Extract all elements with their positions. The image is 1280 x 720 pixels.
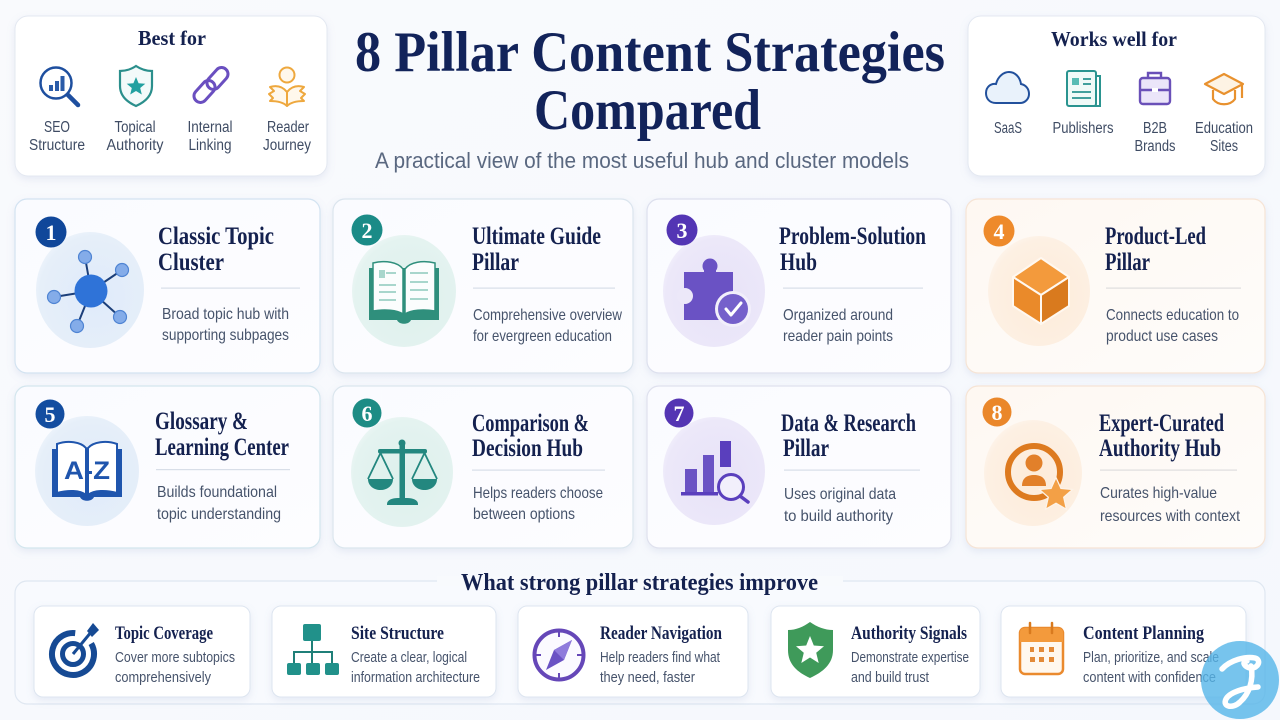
icon: briefcase (1140, 73, 1170, 104)
panel: works well for (968, 16, 1265, 176)
title: 8 Pillar Content Strategies (355, 21, 945, 84)
icon blob (36, 232, 144, 348)
badge 1: 1 (46, 220, 56, 245)
title and text: Reader Navigation (600, 623, 722, 644)
card description: Connects education to (1106, 307, 1239, 324)
panel: strategy 1 (15, 199, 320, 373)
card title: Glossary & (155, 408, 248, 435)
icon: sitemap (287, 624, 339, 675)
card title: Ultimate Guide (472, 223, 601, 250)
panel: strategy 8 (966, 386, 1265, 548)
heading: best for: Best for (138, 26, 206, 50)
icon blob (984, 420, 1082, 526)
card description: Organized around (783, 307, 893, 324)
label: Internal Linking: Linking (188, 137, 232, 154)
card description: supporting subpages (162, 327, 289, 344)
label: B2B Brands: B2B (1143, 120, 1167, 137)
card title: Expert-Curated (1099, 410, 1224, 437)
title and text: Plan, prioritize, and scale (1083, 649, 1219, 666)
badge 7 (664, 398, 694, 428)
label: B2B Brands: Brands (1134, 138, 1176, 155)
title and text: information architecture (351, 669, 480, 686)
icon: calendar (1020, 623, 1063, 674)
card description: for evergreen education (473, 328, 612, 345)
card description: Uses original data (784, 486, 896, 503)
panel: what strong pillar strategies improve (15, 570, 1265, 704)
panel: strategy 6 (333, 386, 633, 548)
card title: Product-Led (1105, 223, 1206, 250)
badge 6: 6 (362, 401, 372, 426)
label: SEO Structure: SEO (44, 119, 70, 136)
section heading: What strong pillar strategies improve (461, 570, 818, 596)
benefit card: reader navigation (518, 606, 748, 697)
label: Internal Linking: Internal (188, 119, 232, 136)
card description: product use cases (1106, 328, 1218, 345)
card title: Problem-Solution (779, 223, 926, 250)
card title: Pillar (472, 249, 519, 276)
icon: target (44, 623, 102, 683)
card title: Authority Hub (1099, 435, 1221, 462)
title and text (1083, 623, 1219, 686)
icon: expert with star (1008, 446, 1071, 508)
panel: best for (15, 16, 327, 176)
title and text: they need, faster (600, 669, 695, 686)
title: Compared (534, 79, 761, 142)
badge 2: 2 (362, 218, 372, 243)
watermark logo (1201, 641, 1279, 719)
title and text (600, 623, 722, 686)
card title: Learning Center (155, 434, 289, 461)
title and text: content with confidence (1083, 669, 1216, 686)
panel: strategy 5 (15, 386, 320, 548)
card description: resources with context (1100, 508, 1240, 525)
benefit card: authority signals (771, 606, 980, 697)
title and text: comprehensively (115, 669, 211, 686)
card title: Hub (780, 249, 817, 276)
icon: cloud (986, 72, 1029, 103)
icon: chain link (191, 65, 231, 105)
card description: Broad topic hub with (162, 306, 289, 323)
icon: shield star (120, 66, 152, 106)
card title: Cluster (158, 249, 224, 276)
title and text (851, 623, 969, 686)
badge 8: 8 (992, 400, 1002, 425)
icon: reader (269, 68, 305, 106)
badge 1 (36, 216, 66, 248)
card description: Helps readers choose (473, 485, 603, 502)
card description: between options (473, 506, 575, 523)
badge 8 (982, 398, 1012, 426)
panel: strategy 2 (333, 199, 633, 373)
title and text: Site Structure (351, 623, 444, 644)
icon blob (352, 235, 456, 347)
title and text: Demonstrate expertise (851, 649, 969, 666)
title and text (351, 623, 480, 686)
badge 3: 3 (676, 218, 688, 243)
badge 5 (36, 400, 64, 428)
badge 5: 5 (44, 402, 56, 427)
panel: strategy 4 (966, 199, 1265, 373)
benefit card: content planning (1001, 606, 1246, 697)
card description: Curates high-value (1100, 485, 1217, 502)
badge 6 (352, 398, 382, 428)
benefit card: site structure (272, 606, 496, 697)
card title: Data & Research (781, 410, 916, 437)
badge 3 (666, 214, 698, 246)
icon: newspaper (1067, 71, 1100, 106)
title and text: Authority Signals (851, 623, 967, 644)
icon: data chart with magnifier (681, 441, 748, 502)
badge 4 (984, 216, 1014, 246)
card title: Classic Topic (158, 223, 274, 250)
icon: open book (369, 262, 439, 324)
panel: strategy 3 (647, 199, 951, 373)
icon blob (351, 417, 453, 527)
title and text: Create a clear, logical (351, 649, 467, 666)
card title: Decision Hub (472, 435, 583, 462)
card title: Comparison & (472, 410, 589, 437)
label: Education Sites: Sites (1210, 138, 1238, 155)
icon: A-Z glossary book (52, 442, 122, 501)
icon: compass (534, 630, 584, 680)
card title: Pillar (1105, 249, 1150, 276)
card description: reader pain points (783, 328, 893, 345)
label: Education Sites: Education (1195, 120, 1253, 137)
icon: puzzle piece with check (677, 258, 751, 327)
icon: SEO magnifier (40, 68, 78, 105)
title and text: Topic Coverage (115, 623, 213, 644)
label: Publishers: Publishers (1052, 120, 1114, 137)
label: Topical Authority: Authority (106, 137, 164, 154)
subtitle: A practical view of the most useful hub and cluster models (375, 148, 909, 173)
icon: graduation cap (1205, 74, 1243, 104)
card description: Comprehensive overview (473, 307, 622, 324)
icon blob (35, 416, 139, 526)
badge 7: 7 (674, 401, 684, 426)
title and text: Help readers find what (600, 649, 721, 666)
label: SEO Structure: Structure (29, 137, 85, 154)
icon: balance scales (368, 440, 437, 505)
heading: works well for: Works well for (1051, 27, 1177, 51)
card description: to build authority (784, 508, 893, 525)
icon: A-Z glossary book: A-Z (64, 457, 110, 485)
icon blob (663, 417, 765, 525)
title (355, 21, 945, 142)
icon blob (663, 235, 765, 347)
title and text: Cover more subtopics (115, 649, 235, 666)
title and text (115, 623, 235, 686)
icon: product cube (1013, 258, 1069, 324)
badge 2 (352, 214, 382, 246)
label: SaaS: SaaS (994, 120, 1022, 137)
icon blob (988, 236, 1090, 346)
badge 4: 4 (994, 219, 1004, 244)
label: Reader Journey: Journey (263, 137, 311, 154)
label: Topical Authority: Topical (114, 119, 156, 136)
label: Reader Journey: Reader (267, 119, 309, 136)
title and text: and build trust (851, 669, 930, 686)
benefit card: topic coverage (34, 606, 250, 697)
icon: topic cluster (48, 250, 128, 332)
card description: topic understanding (157, 506, 281, 523)
card title: Pillar (783, 435, 829, 462)
icon: green shield (788, 622, 833, 678)
panel: strategy 7 (647, 386, 951, 548)
card description: Builds foundational (157, 484, 277, 501)
title and text: Content Planning (1083, 623, 1204, 644)
